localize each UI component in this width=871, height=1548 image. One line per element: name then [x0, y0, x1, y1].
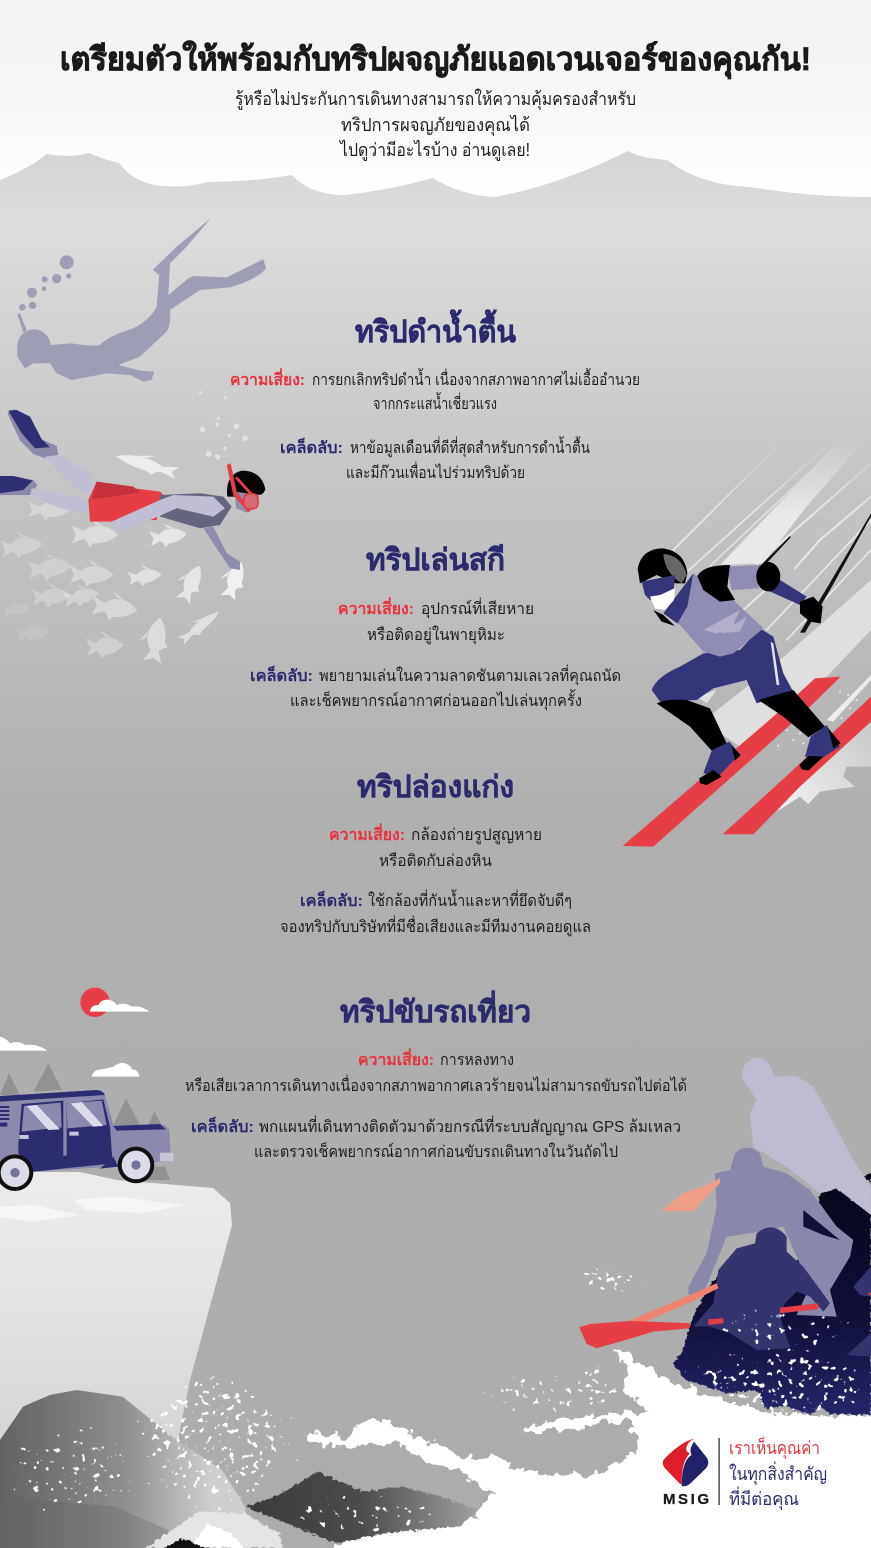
intro text: ทริปการผจญภัยของคุณได้: [341, 114, 530, 136]
tip text: จองทริปกับบริษัทที่มีชื่อเสียงและมีทีมงานคอยดูแล: [280, 915, 591, 937]
tip text: พยายามเล่นในความลาดชันตามเลเวลที่คุณถนัด: [319, 664, 621, 686]
top cloud layer: [0, 0, 871, 225]
divider: [718, 1438, 720, 1505]
heading: ทริปขับรถเที่ยว: [340, 990, 531, 1029]
illustration: ski slope streaks: [673, 440, 871, 640]
tip text: และเช็คพยากรณ์อากาศก่อนออกไปเล่นทุกครั้ง: [290, 689, 582, 711]
illustration: skier: [623, 513, 871, 847]
illustration: dark mountain: [145, 1472, 478, 1548]
illustration: school of fish: [0, 445, 252, 664]
tip text: หาข้อมูลเดือนที่ดีที่สุดสำหรับการดำน้ำตื้น: [350, 436, 590, 458]
illustration: cliff: [0, 1172, 232, 1460]
risk text: [338, 597, 534, 645]
illustration: raft spray flecks: [655, 1302, 871, 1435]
risk text: หรือติดอยู่ในพายุหิมะ: [367, 625, 505, 645]
risk text: จากกระแสน้ำเชี่ยวแรง: [373, 392, 497, 413]
tip text: เคล็ดลับ:: [191, 1115, 254, 1136]
wordmark: MSIG: [663, 1491, 709, 1508]
risk text: อุปกรณ์ที่เสียหาย: [421, 597, 534, 619]
section: rafting: [280, 771, 591, 937]
tip text: [250, 664, 621, 711]
tip text: [191, 1115, 681, 1161]
illustration: snow slope: [697, 580, 871, 812]
illustration: snorkeller: [0, 391, 265, 570]
tip text: เคล็ดลับ:: [300, 889, 363, 910]
risk text: หรือติดกับล่องหิน: [379, 852, 492, 870]
risk text: ความเสี่ยง:: [230, 368, 305, 389]
heading: ทริปเล่นสกี: [366, 544, 505, 577]
tip text: [280, 889, 591, 937]
illustration: big mountain: [0, 1390, 249, 1548]
illustration: jeep: [0, 1090, 183, 1222]
title: เตรียมตัวให้พร้อมกับทริปผจญภัยแอดเวนเจอร์ของคุณกัน!: [60, 40, 811, 80]
illustration: silhouette diver: [17, 218, 266, 382]
tip text: [280, 436, 590, 482]
risk text: [185, 1048, 687, 1095]
illustration: sun and clouds: [0, 988, 149, 1077]
illustration: white water: [310, 1347, 871, 1548]
section: snorkelling: [230, 309, 640, 482]
illustration: pine trees: [0, 1063, 170, 1180]
heading: ทริปล่องแก่ง: [357, 771, 514, 804]
tip text: และมีก๊วนเพื่อนไปร่วมทริปด้วย: [346, 461, 525, 482]
risk text: การหลงทาง: [440, 1052, 514, 1069]
logo: MSIG: [663, 1436, 827, 1510]
tip text: พกแผนที่เดินทางติดตัวมาด้วยกรณีที่ระบบสัญญาณ GPS ล้มเหลว: [259, 1115, 681, 1136]
intro text: [235, 88, 636, 161]
tagline: [729, 1436, 827, 1510]
section: skiing: [250, 544, 621, 711]
tip text: ใช้กล้องที่กันน้ำและหาที่ยึดจับดีๆ: [368, 889, 572, 910]
tagline: ในทุกสิ่งสำคัญ: [729, 1461, 827, 1485]
intro text: ไปดูว่ามีอะไรบ้าง อ่านดูเลย!: [338, 139, 530, 161]
tip text: เคล็ดลับ:: [250, 664, 313, 685]
risk text: กล้องถ่ายรูปสูญหาย: [411, 826, 542, 845]
section: road trip: [185, 990, 687, 1161]
icon: MSIG diamond: [663, 1439, 708, 1486]
risk text: หรือเสียเวลาการเดินทางเนื่องจากสภาพอากาศเลวร้ายจนไม่สามารถขับรถไปต่อได้: [185, 1074, 687, 1095]
tip text: เคล็ดลับ:: [280, 436, 343, 457]
tagline: เราเห็นคุณค่า: [729, 1436, 820, 1459]
risk text: การยกเลิกทริปดำน้ำ เนื่องจากสภาพอากาศไม่เอื้ออำนวย: [312, 368, 640, 389]
risk text: ความเสี่ยง:: [358, 1048, 434, 1069]
illustration: rafters: [579, 1057, 871, 1415]
tagline: ที่มีต่อคุณ: [729, 1486, 799, 1510]
intro text: รู้หรือไม่ประกันการเดินทางสามารถให้ความคุ้มครองสำหรับ: [235, 88, 636, 110]
risk text: ความเสี่ยง:: [338, 597, 414, 618]
risk text: ความเสี่ยง:: [329, 823, 405, 844]
tip text: และตรวจเช็คพยากรณ์อากาศก่อนขับรถเดินทางในวันถัดไป: [254, 1141, 618, 1161]
risk text: [329, 823, 542, 870]
heading: ทริปดำน้ำตื้น: [355, 309, 516, 349]
risk text: [230, 368, 640, 413]
illustration: water spray flecks: [0, 1262, 654, 1543]
